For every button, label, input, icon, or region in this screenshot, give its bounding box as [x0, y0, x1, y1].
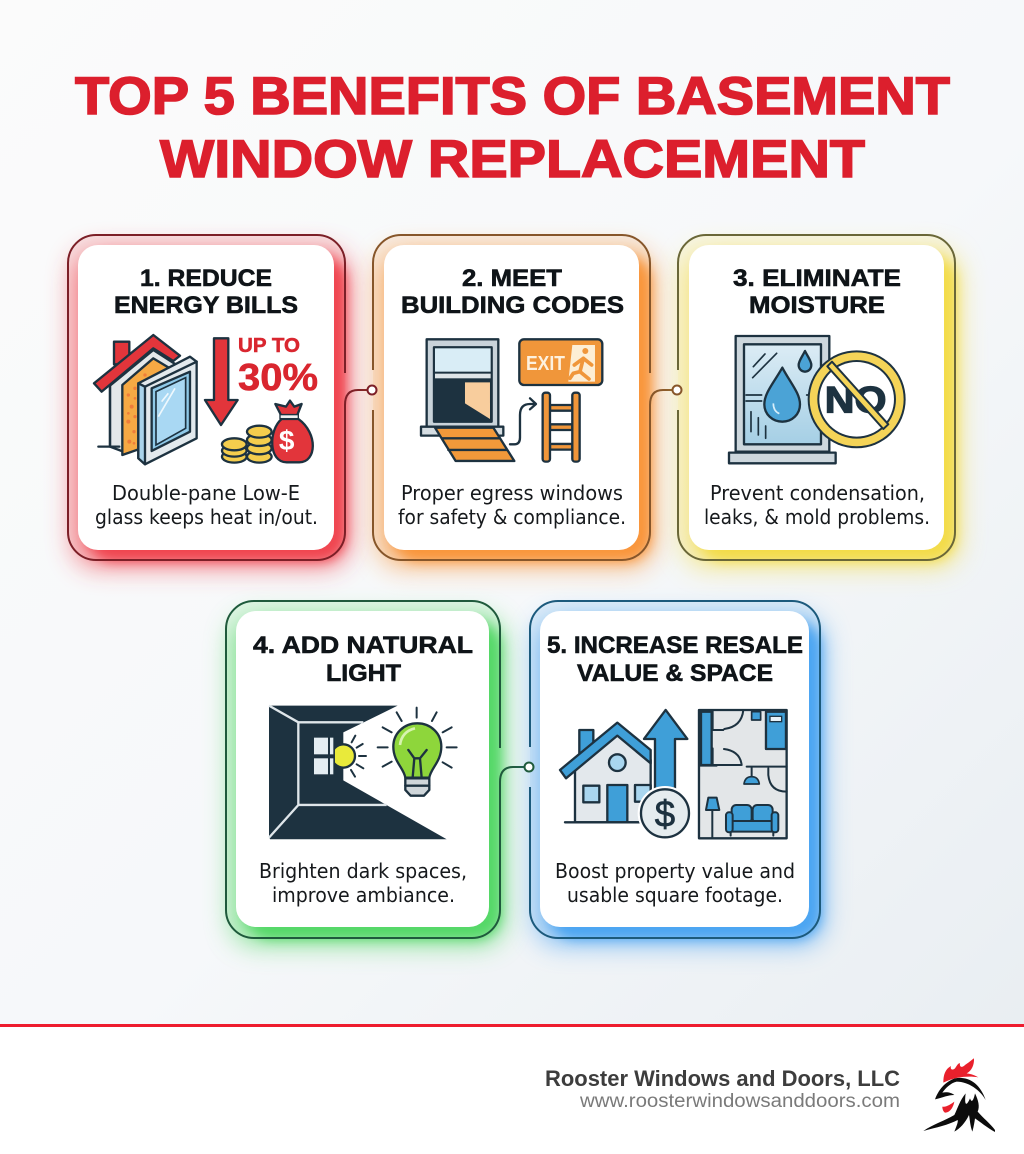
text block — [95, 481, 318, 529]
text block: glass keeps heat in/out. — [95, 505, 318, 529]
icon: egress window, exit sign and ladder — [421, 339, 602, 462]
icon: egress window, exit sign and ladder: EXIT — [526, 352, 565, 375]
heading — [114, 265, 298, 319]
panel: eliminate moisture — [678, 235, 960, 568]
heading: 1. REDUCE — [140, 265, 272, 292]
icon: dark room with window and light bulb — [269, 706, 457, 839]
icon: wet window with no symbol: NO — [825, 379, 886, 421]
text block: Double-pane Low-E — [112, 481, 300, 505]
text block: for safety & compliance. — [398, 505, 626, 529]
footer — [0, 1024, 1024, 1154]
panel: reduce energy bills — [68, 235, 367, 568]
text block — [259, 859, 467, 907]
text block — [555, 859, 795, 907]
heading: 2. MEET — [462, 265, 562, 292]
heading: 5. INCREASE RESALE — [547, 632, 803, 659]
heading: BUILDING CODES — [401, 292, 624, 319]
title: TOP 5 BENEFITS OF BASEMENT — [75, 67, 950, 126]
title — [75, 67, 950, 189]
text block: Boost property value and — [555, 859, 795, 883]
text block — [704, 481, 930, 529]
icon: rooster logo — [923, 1058, 995, 1132]
callout: up to 30% — [238, 335, 318, 399]
heading: 3. ELIMINATE — [733, 265, 901, 292]
heading: VALUE & SPACE — [577, 660, 773, 687]
heading: LIGHT — [326, 660, 401, 687]
callout: up to 30%: UP TO — [238, 335, 300, 357]
text block — [398, 481, 626, 529]
text block: usable square footage. — [567, 883, 783, 907]
heading — [547, 632, 803, 687]
heading: 4. ADD NATURAL — [253, 632, 473, 659]
icon: house with value arrow and floor plan — [560, 710, 787, 841]
website: www.roosterwindowsanddoors.com — [579, 1091, 900, 1112]
icon: wet window with no symbol — [729, 336, 906, 463]
title: WINDOW REPLACEMENT — [160, 130, 865, 189]
heading — [733, 265, 901, 319]
connector: card 1 to card 2 — [368, 386, 376, 394]
connector: card 2 to card 3 — [672, 386, 682, 394]
icon: house, insulation and window with savings: $ — [279, 425, 295, 456]
text block: Brighten dark spaces, — [259, 859, 467, 883]
icon: house, insulation and window with savings — [94, 335, 313, 464]
company name: Rooster Windows and Doors, LLC — [545, 1066, 900, 1091]
text block: improve ambiance. — [272, 883, 455, 907]
connector: card 4 to card 5 — [524, 762, 534, 772]
heading: ENERGY BILLS — [114, 292, 298, 319]
panel: increase resale value and space — [530, 601, 825, 946]
text block: Proper egress windows — [401, 481, 623, 505]
callout: up to 30%: 30% — [238, 357, 318, 399]
text block: leaks, & mold problems. — [704, 505, 930, 529]
panel: add natural light — [226, 601, 524, 946]
panel: meet building codes — [373, 235, 672, 568]
text block: Prevent condensation, — [710, 481, 925, 505]
icon: house with value arrow and floor plan: $ — [655, 794, 675, 835]
heading: MOISTURE — [749, 292, 885, 319]
heading — [401, 265, 624, 319]
heading — [253, 632, 473, 687]
